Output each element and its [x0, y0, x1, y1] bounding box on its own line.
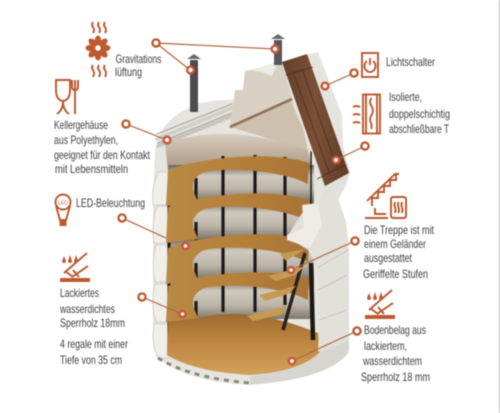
text: door: Isolierte,	[389, 90, 422, 104]
callout: floor	[289, 327, 361, 364]
floor	[167, 314, 320, 375]
shelf 4	[166, 272, 309, 322]
text: stairs	[363, 223, 434, 281]
ceiling	[165, 134, 312, 172]
icon: glass and fork	[56, 80, 78, 114]
icon: waterproof plywood left	[60, 253, 90, 282]
text: door	[389, 90, 450, 136]
text: ventilation: lüftung	[115, 65, 142, 79]
icon: light switch	[362, 53, 378, 77]
text: housing: geeignet für den Kontakt	[54, 148, 150, 162]
icon: insulated door	[353, 94, 380, 134]
callout: stairs	[288, 237, 359, 273]
callout: light switch	[322, 69, 358, 89]
text: stairs: Die Treppe ist mit	[364, 223, 434, 237]
right shell	[287, 120, 350, 352]
text: door: doppelschichtig	[389, 107, 450, 121]
icon: stairs	[365, 174, 406, 218]
callout: LED	[118, 214, 188, 249]
text: LED: LED-Beleuchtung	[76, 196, 145, 210]
wall posts	[169, 150, 311, 355]
text: ventilation	[115, 52, 162, 79]
text: floor: wasserdichtem	[362, 354, 422, 368]
stair stringer	[283, 253, 305, 330]
shelf 1	[166, 156, 309, 206]
text: floor	[361, 323, 430, 384]
door	[282, 54, 349, 186]
text: floor: Bodenbelag aus	[364, 323, 426, 337]
shelf 2	[166, 193, 309, 243]
text: stairs: ausgestattet	[364, 251, 412, 265]
ridge strips	[157, 104, 232, 146]
icon: LED bulb: LED	[58, 200, 68, 206]
text: plywood: 4 regale mit einer	[60, 337, 128, 351]
text: plywood: wasserdichtes	[59, 302, 115, 316]
text: ventilation: Gravitations	[116, 52, 162, 66]
stair housing	[230, 62, 305, 150]
text: housing	[54, 118, 150, 176]
stair treads	[247, 249, 305, 321]
shelf 3	[166, 234, 309, 284]
text: plywood: Tiefe von 35 cm	[60, 353, 122, 367]
text: floor: lackiertem,	[364, 339, 407, 353]
stair landing	[287, 203, 322, 248]
frame edge	[499, 0, 500, 413]
text: light switch: Lichtschalter	[386, 55, 435, 69]
callout: plywood	[138, 293, 186, 317]
callout: ventilation	[152, 39, 278, 73]
text: floor: Sperrholz 18 mm	[361, 370, 430, 384]
text: plywood	[59, 286, 128, 367]
icon: LED bulb	[56, 194, 70, 226]
text: housing: aus Polyethylen,	[54, 133, 118, 147]
text: stairs: einem Geländer	[364, 237, 426, 251]
text: housing: Kellergehäuse	[54, 118, 108, 132]
text: plywood: Sperrholz 18mm	[60, 316, 125, 330]
callout: door	[333, 142, 369, 163]
text: stairs: Geriffelte Stufen	[363, 267, 428, 281]
outer shell	[153, 52, 350, 385]
text: plywood: Lackiertes	[60, 286, 99, 300]
chimney 1	[187, 54, 201, 112]
silo illustration	[153, 34, 350, 385]
text: housing: mit Lebensmitteln	[55, 162, 128, 176]
callout: housing	[122, 120, 170, 143]
text: door: abschließbare T	[389, 122, 449, 136]
base teeth	[158, 358, 250, 383]
base rim	[250, 340, 349, 385]
chimney 2	[271, 34, 285, 65]
icon: waterproof plywood right	[365, 290, 395, 319]
back wall	[168, 165, 314, 319]
icon: fan	[86, 22, 110, 77]
left wall segments	[153, 172, 168, 358]
